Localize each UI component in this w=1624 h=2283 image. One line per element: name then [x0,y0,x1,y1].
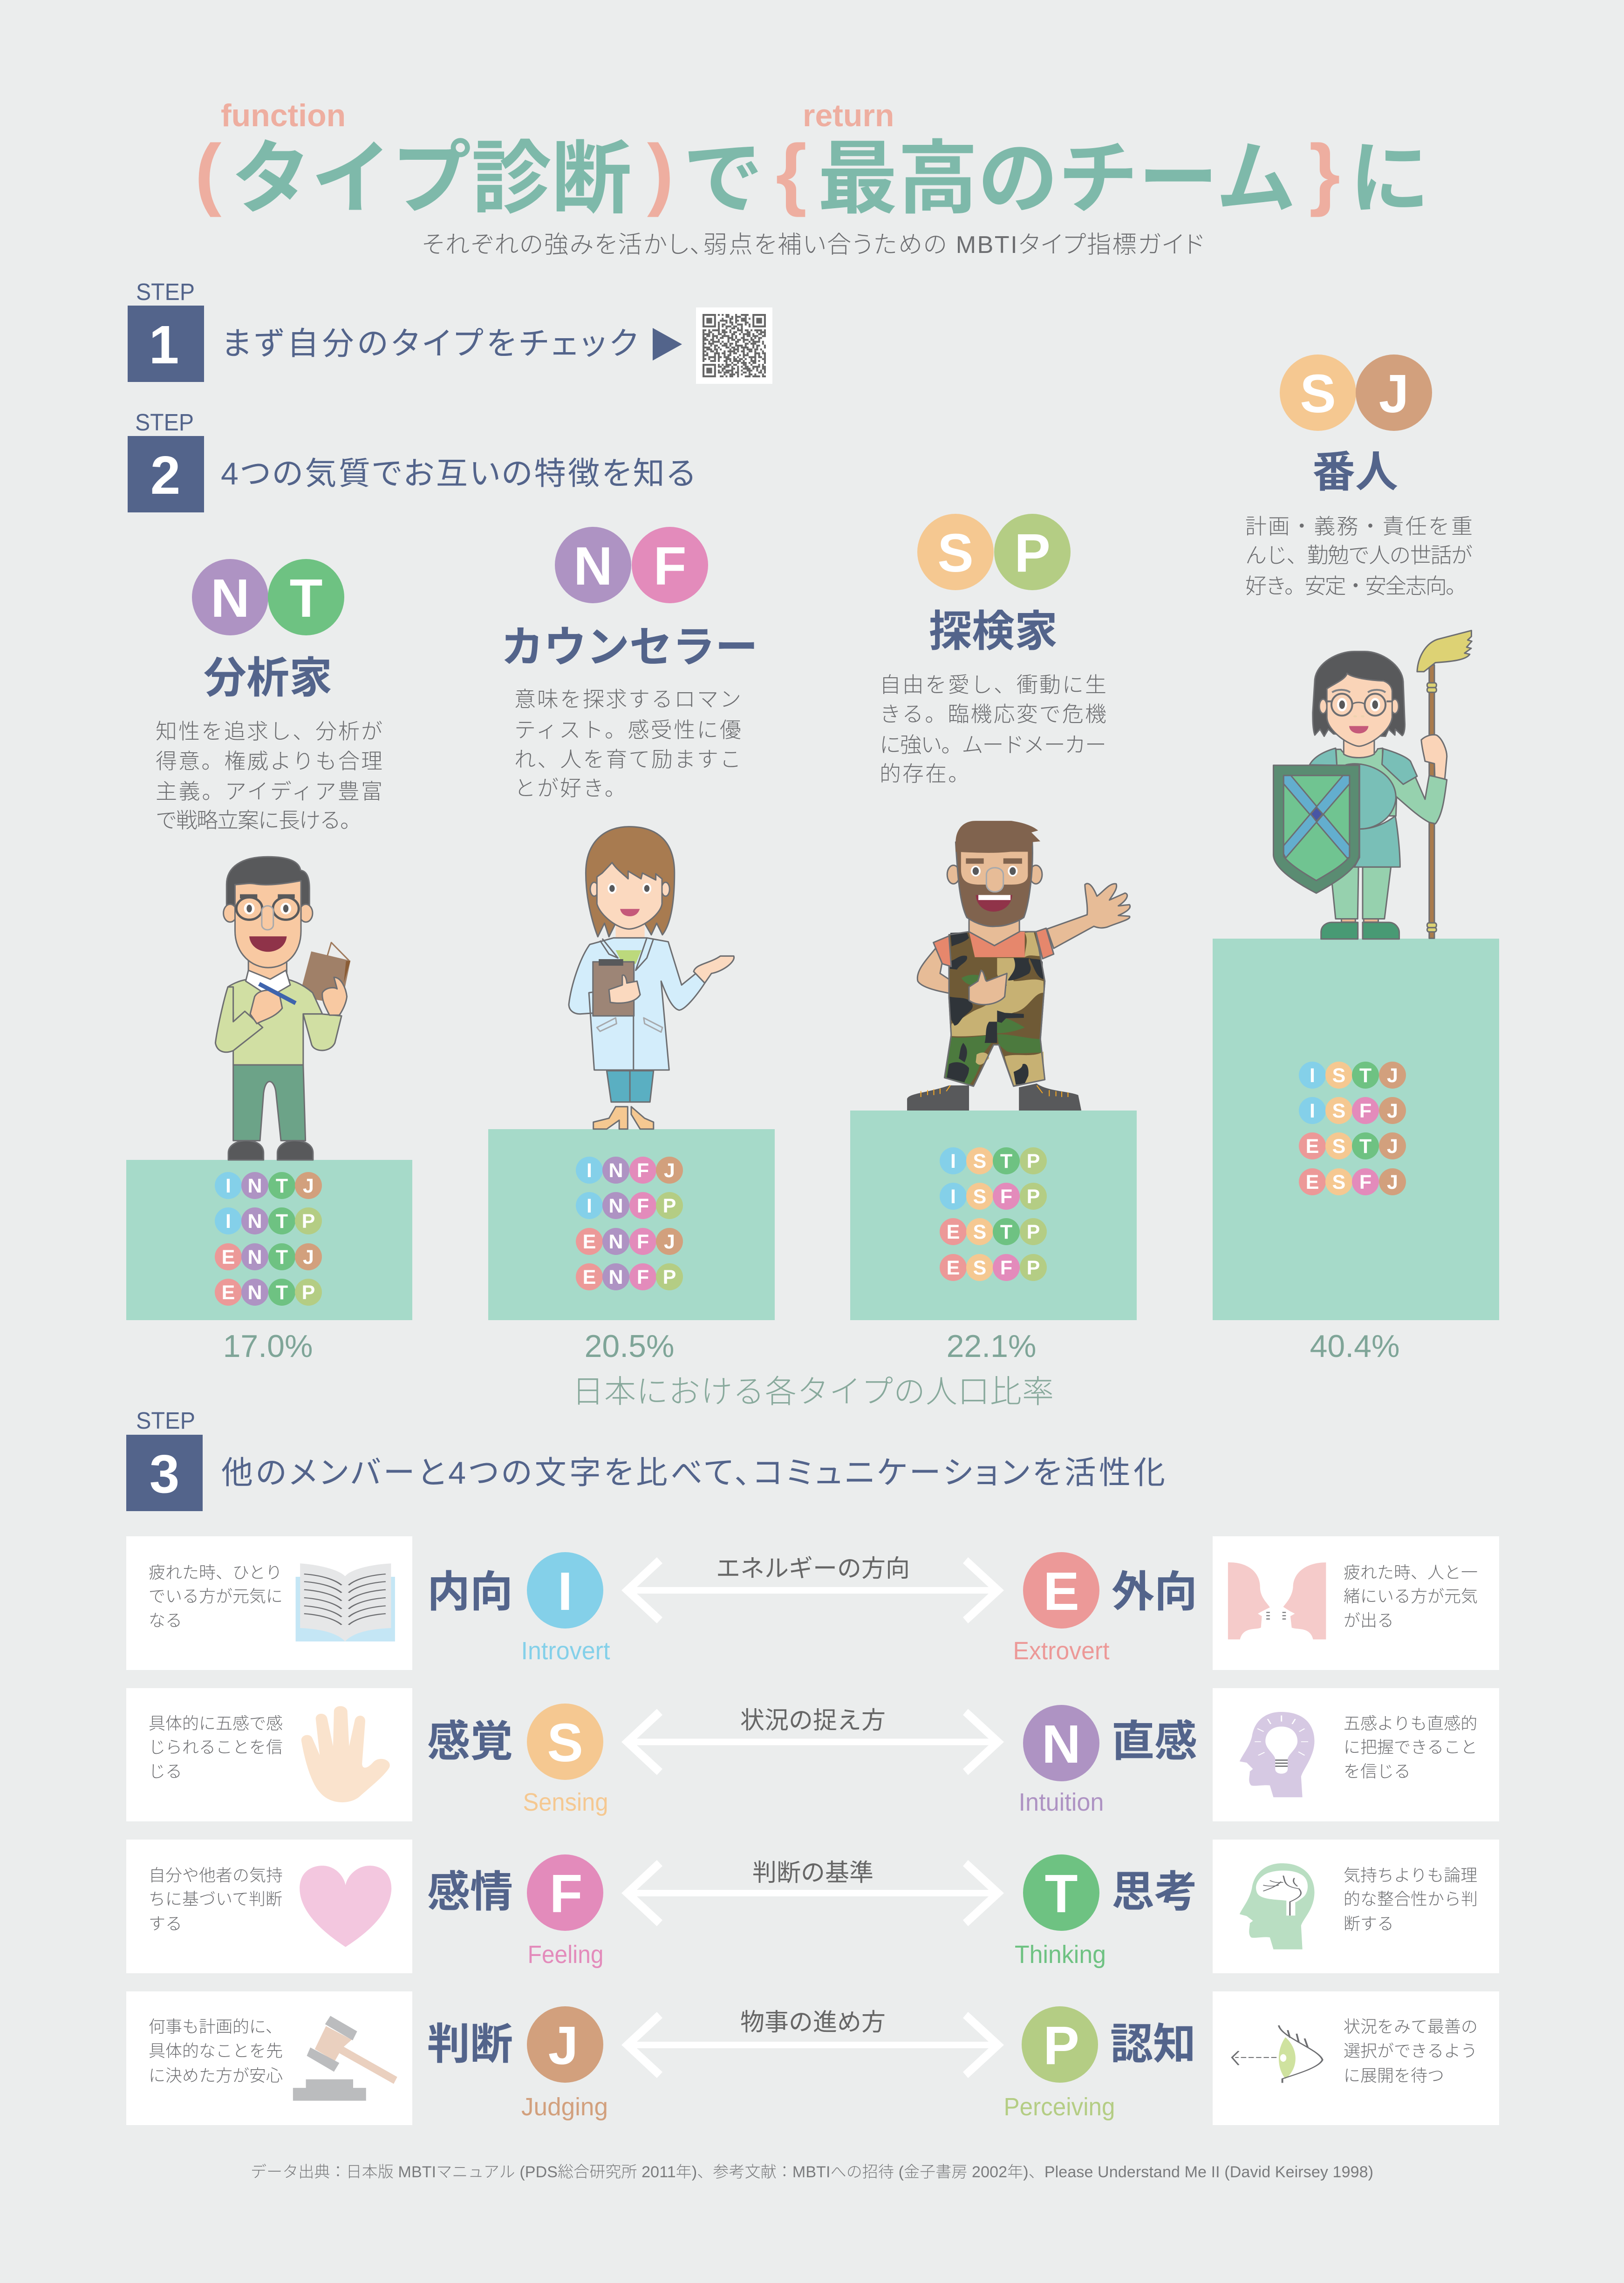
type badges: NT: P [302,1210,315,1233]
panel: NT analyst: で戦略立案に長ける。 [156,808,363,832]
text: thinking: 断する [1344,1914,1394,1933]
type badges: NF: P [663,1266,676,1288]
QR code [696,307,772,384]
type badges: SJ: J [1387,1171,1398,1193]
letter J: J [548,2015,578,2076]
panel: SP explorer: 的存在。 [880,762,971,786]
label: 判断: 判断 [427,2021,513,2068]
type badges: NT: E [222,1281,235,1304]
type badges: SP: F [1000,1186,1012,1208]
type badges: NF: I [587,1159,592,1182]
panel: NF counselor: れ、人を育て励ますこ [514,747,743,771]
step 2 [128,409,695,512]
panel: SJ guardian: んじ、勤勉で人の世話が [1245,543,1474,567]
text: feeling: ちに基づいて判断 [149,1889,282,1908]
icon: hand [301,1706,390,1802]
label: Judging: Judging [521,2093,608,2121]
type badges: NT: J [303,1246,314,1268]
type badges: NT: T [276,1281,288,1304]
type badges: NT: N [247,1246,262,1268]
icon: two faces [1228,1562,1326,1639]
type badges: NT: N [247,1175,262,1197]
type badges: SJ: J [1387,1135,1398,1158]
letter T [1023,1854,1099,1931]
icon: eye [1232,2025,1323,2083]
title: タイプ診断 [231,134,632,224]
subtitle: それぞれの強みを活かし、弱点を補い合うための MBTIタイプ指標ガイド [422,232,1204,259]
panel: NF counselor: カウンセラー [501,624,758,671]
type badges: NF: P [663,1195,676,1217]
label: 感覚: 感覚 [427,1718,513,1765]
type badges: NT: P [302,1281,315,1304]
text: judging: 何事も計画的に、 [149,2017,282,2036]
icon: brain head [1240,1863,1315,1949]
type badges: NF [576,1157,683,1290]
type badges: SP: S [973,1150,986,1172]
title: { [776,128,807,218]
title [195,98,1430,224]
arrow [621,2012,1004,2078]
panel: NF counselor: 意味を探求するロマン [514,687,743,711]
type badges: NF: N [608,1195,623,1217]
type badges: SP: S [973,1257,986,1279]
text: perceiving: 選択ができるよう [1344,2041,1477,2060]
footer source: データ出典：日本版 MBTIマニュアル (PDS総合研究所 2011年)、参考文献：MBTIへの招待 (金子書房 2002年)、Please Understand Me II (David Keirsey 1998) [251,2163,1373,2181]
text: intuition: に把握できること [1344,1738,1477,1757]
title: return [803,98,894,133]
step 3 [126,1407,1165,1511]
type badges: NT: N [247,1210,262,1233]
label: 感情: 感情 [427,1868,513,1916]
type badges: SJ: I [1310,1100,1315,1122]
character: NT man with book [215,857,350,1160]
panel: NT analyst: N [211,568,250,628]
type badges: NT: N [247,1281,262,1304]
step 2: 2 [150,445,180,505]
panel: NT analyst [156,559,384,832]
letter P: P [1043,2015,1079,2076]
panel: SJ guardian: S [1300,363,1336,424]
type badges: NF: N [608,1231,623,1253]
chart caption: 日本における各タイプの人口比率 [572,1374,1054,1410]
type badges: NT: I [225,1210,231,1233]
row: judging / perceiving [126,1991,1499,2125]
step 1: STEP [136,279,195,305]
panel: NT analyst: 主義。アイディア豊富 [156,779,384,804]
label: Perceiving: Perceiving [1003,2093,1115,2121]
label: 直感: 直感 [1112,1718,1197,1765]
panel: NT analyst: T [290,568,322,628]
letter F [527,1854,603,1931]
bar: SP [850,1111,1137,1320]
type badges: NF: F [637,1159,649,1182]
panel: SP explorer: P [1014,523,1051,583]
bar: NT [126,1160,412,1320]
character: NF woman in lab coat [569,827,734,1129]
type badges: NF: N [608,1266,623,1288]
type badges: SP: F [1000,1257,1012,1279]
title: ) [647,128,674,218]
type badges: SJ [1299,1062,1406,1195]
step 1 [128,279,772,384]
type badges: SP: P [1027,1150,1040,1172]
type badges: SP: P [1027,1257,1040,1279]
panel: NF counselor: ティスト。感受性に優 [514,718,743,742]
type badges: SJ: J [1387,1064,1398,1087]
type badges: SJ: T [1359,1135,1372,1158]
arrow label: 物事の進め方 [740,2009,886,2036]
percentages: 40.4% [1310,1329,1399,1364]
panel: NF counselor: N [573,536,613,596]
type badges: NF: I [587,1195,592,1217]
type badges: SJ: T [1359,1064,1372,1087]
label: 認知: 認知 [1110,2021,1196,2068]
icon: book [296,1563,395,1642]
text: introvert: なる [149,1611,182,1630]
step 3: 3 [150,1444,179,1504]
panel: SJ guardian: 番人 [1312,449,1398,496]
title: に [1350,134,1430,224]
type badges: NT: J [303,1175,314,1197]
panel: SP explorer: 探検家 [929,608,1058,655]
panel: SP explorer: S [937,523,974,583]
panel: NT analyst: 得意。権威よりも合理 [156,749,384,773]
text: sensing: じる [149,1762,182,1781]
panel: NT analyst: 知性を追求し、分析が [156,719,384,743]
label: Thinking: Thinking [1015,1941,1106,1969]
character: SJ guardian with shield [1273,631,1472,939]
label: 外向: 外向 [1112,1568,1197,1616]
label: 思考: 思考 [1112,1868,1197,1916]
panel: NF counselor: とが好き。 [514,776,628,800]
row: feeling / thinking [126,1840,1499,1973]
type badges: NF: J [664,1159,675,1182]
type badges: NF: F [637,1231,649,1253]
type badges: SJ: S [1332,1135,1345,1158]
title: 最高のチーム [818,134,1296,224]
panel: SP explorer: 自由を愛し、衝動に生 [880,673,1108,697]
text: perceiving: に展開を待つ [1344,2066,1444,2085]
type badges: SP: S [973,1186,986,1208]
text: introvert: 疲れた時、ひとり [149,1563,282,1582]
panel: NF counselor: F [654,536,686,596]
type badges: SP: I [950,1186,956,1208]
panel: SJ guardian: 好き。安定・安全志向。 [1245,574,1468,598]
character: SP explorer in camo [907,821,1130,1111]
panel: SJ guardian: 計画・義務・責任を重 [1245,514,1474,538]
type badges: NT: T [276,1175,288,1197]
bar: NF [488,1129,775,1320]
text: judging: 具体的なことを先 [149,2041,283,2060]
type badges: NF: E [583,1266,596,1288]
title: } [1309,128,1340,218]
label: Intuition: Intuition [1018,1788,1104,1816]
letter T: T [1045,1863,1078,1924]
step 1: まず自分のタイプをチェック [222,326,638,361]
type badges: SJ: F [1359,1100,1372,1122]
type badges: SP: E [947,1221,960,1243]
type badges: SJ: J [1387,1100,1398,1122]
type badges: SJ: I [1310,1064,1315,1087]
percentages: 17.0% [223,1329,313,1364]
type badges: NT: T [276,1246,288,1268]
step 2: 4つの気質でお互いの特徴を知る [221,456,695,491]
type badges: NT [215,1172,322,1306]
percentages: 22.1% [947,1329,1036,1364]
type badges: NT: E [222,1246,235,1268]
panel: SJ guardian [1245,354,1474,598]
text: perceiving: 状況をみて最善の [1344,2017,1478,2036]
title: function [221,98,346,133]
text: extrovert: 疲れた時、人と一 [1344,1563,1478,1582]
arrow [621,1860,1004,1926]
type badges: NT: I [225,1175,231,1197]
type badges: SJ: E [1306,1171,1319,1193]
icon: gavel [293,2016,397,2101]
type badges: SJ: E [1306,1135,1319,1158]
arrow label: 状況の捉え方 [740,1707,886,1734]
percentages [223,1329,1399,1364]
panel: SP explorer: きる。臨機応変で危機 [880,702,1108,726]
text: sensing: じられることを信 [149,1738,283,1757]
type badges: SP: T [1000,1221,1012,1243]
type badges: SJ: S [1332,1171,1345,1193]
text: sensing: 具体的に五感で感 [149,1714,283,1733]
icon: heart [300,1866,391,1947]
type badges: SP: I [950,1150,956,1172]
text: extrovert: が出る [1344,1611,1394,1630]
type badges: SP: S [973,1221,986,1243]
type badges: SP [940,1147,1047,1281]
step 3: 他のメンバーと4つの文字を比べて、コミュニケーションを活性化 [221,1455,1165,1491]
text: feeling: 自分や他者の気持 [149,1866,283,1885]
letter F: F [550,1863,582,1924]
type badges: SJ: S [1332,1064,1345,1087]
arrow label: 判断の基準 [752,1860,873,1887]
type badges: SJ: F [1359,1171,1372,1193]
panel: SP explorer [880,514,1108,786]
letter E [1023,1552,1099,1629]
type badges: SP: P [1027,1186,1040,1208]
type badges: NF: N [608,1159,623,1182]
text: extrovert: 緒にいる方が元気 [1344,1587,1478,1606]
title: で [683,134,763,224]
text: feeling: する [149,1914,182,1933]
label: Sensing: Sensing [523,1788,608,1816]
title: ( [195,128,222,218]
letter E: E [1043,1561,1079,1622]
type badges: SP: E [947,1257,960,1279]
step 1: 1 [149,314,179,375]
panel: SP explorer: に強い。ムードメーカー [880,733,1108,757]
type badges: SJ: S [1332,1100,1345,1122]
type badges: NF: E [583,1231,596,1253]
text: intuition: 五感よりも直感的 [1344,1714,1477,1733]
percentages: 20.5% [585,1329,674,1364]
label: Feeling: Feeling [527,1941,604,1969]
row: sensing / intuition [126,1688,1499,1821]
arrow [621,1557,1004,1623]
text: judging: に決めた方が安心 [149,2066,283,2085]
letter I: I [558,1561,573,1622]
text: thinking: 気持ちよりも論理 [1344,1866,1477,1885]
step 3: STEP [136,1407,195,1434]
text: thinking: 的な整合性から判 [1344,1889,1478,1908]
letter S [527,1704,603,1780]
panel: NT analyst: 分析家 [204,654,332,702]
arrow [621,1709,1004,1775]
arrow label: エネルギーの方向 [716,1555,910,1582]
type badges: SP: P [1027,1221,1040,1243]
type badges: NF: F [637,1266,649,1288]
icon: lightbulb head [1240,1712,1315,1797]
label: 内向: 内向 [427,1568,513,1616]
letter N: N [1042,1714,1081,1774]
text: intuition: を信じる [1344,1762,1411,1781]
bar: SJ [1213,939,1499,1320]
text: introvert: でいる方が元気に [149,1587,283,1606]
panel: NF counselor [501,527,758,800]
letter N [1023,1705,1099,1781]
row: introvert / extrovert [126,1536,1499,1670]
label: Introvert: Introvert [521,1637,610,1665]
panel: SJ guardian: J [1379,363,1409,424]
letter J [527,2006,603,2083]
letter S: S [547,1712,583,1773]
letter I [527,1552,603,1629]
type badges: SP: T [1000,1150,1012,1172]
type badges: NF: J [664,1231,675,1253]
type badges: NT: T [276,1210,288,1233]
label: Extrovert: Extrovert [1013,1637,1110,1665]
step 2: STEP [135,409,194,436]
letter P [1022,2006,1098,2083]
type badges: NF: F [637,1195,649,1217]
